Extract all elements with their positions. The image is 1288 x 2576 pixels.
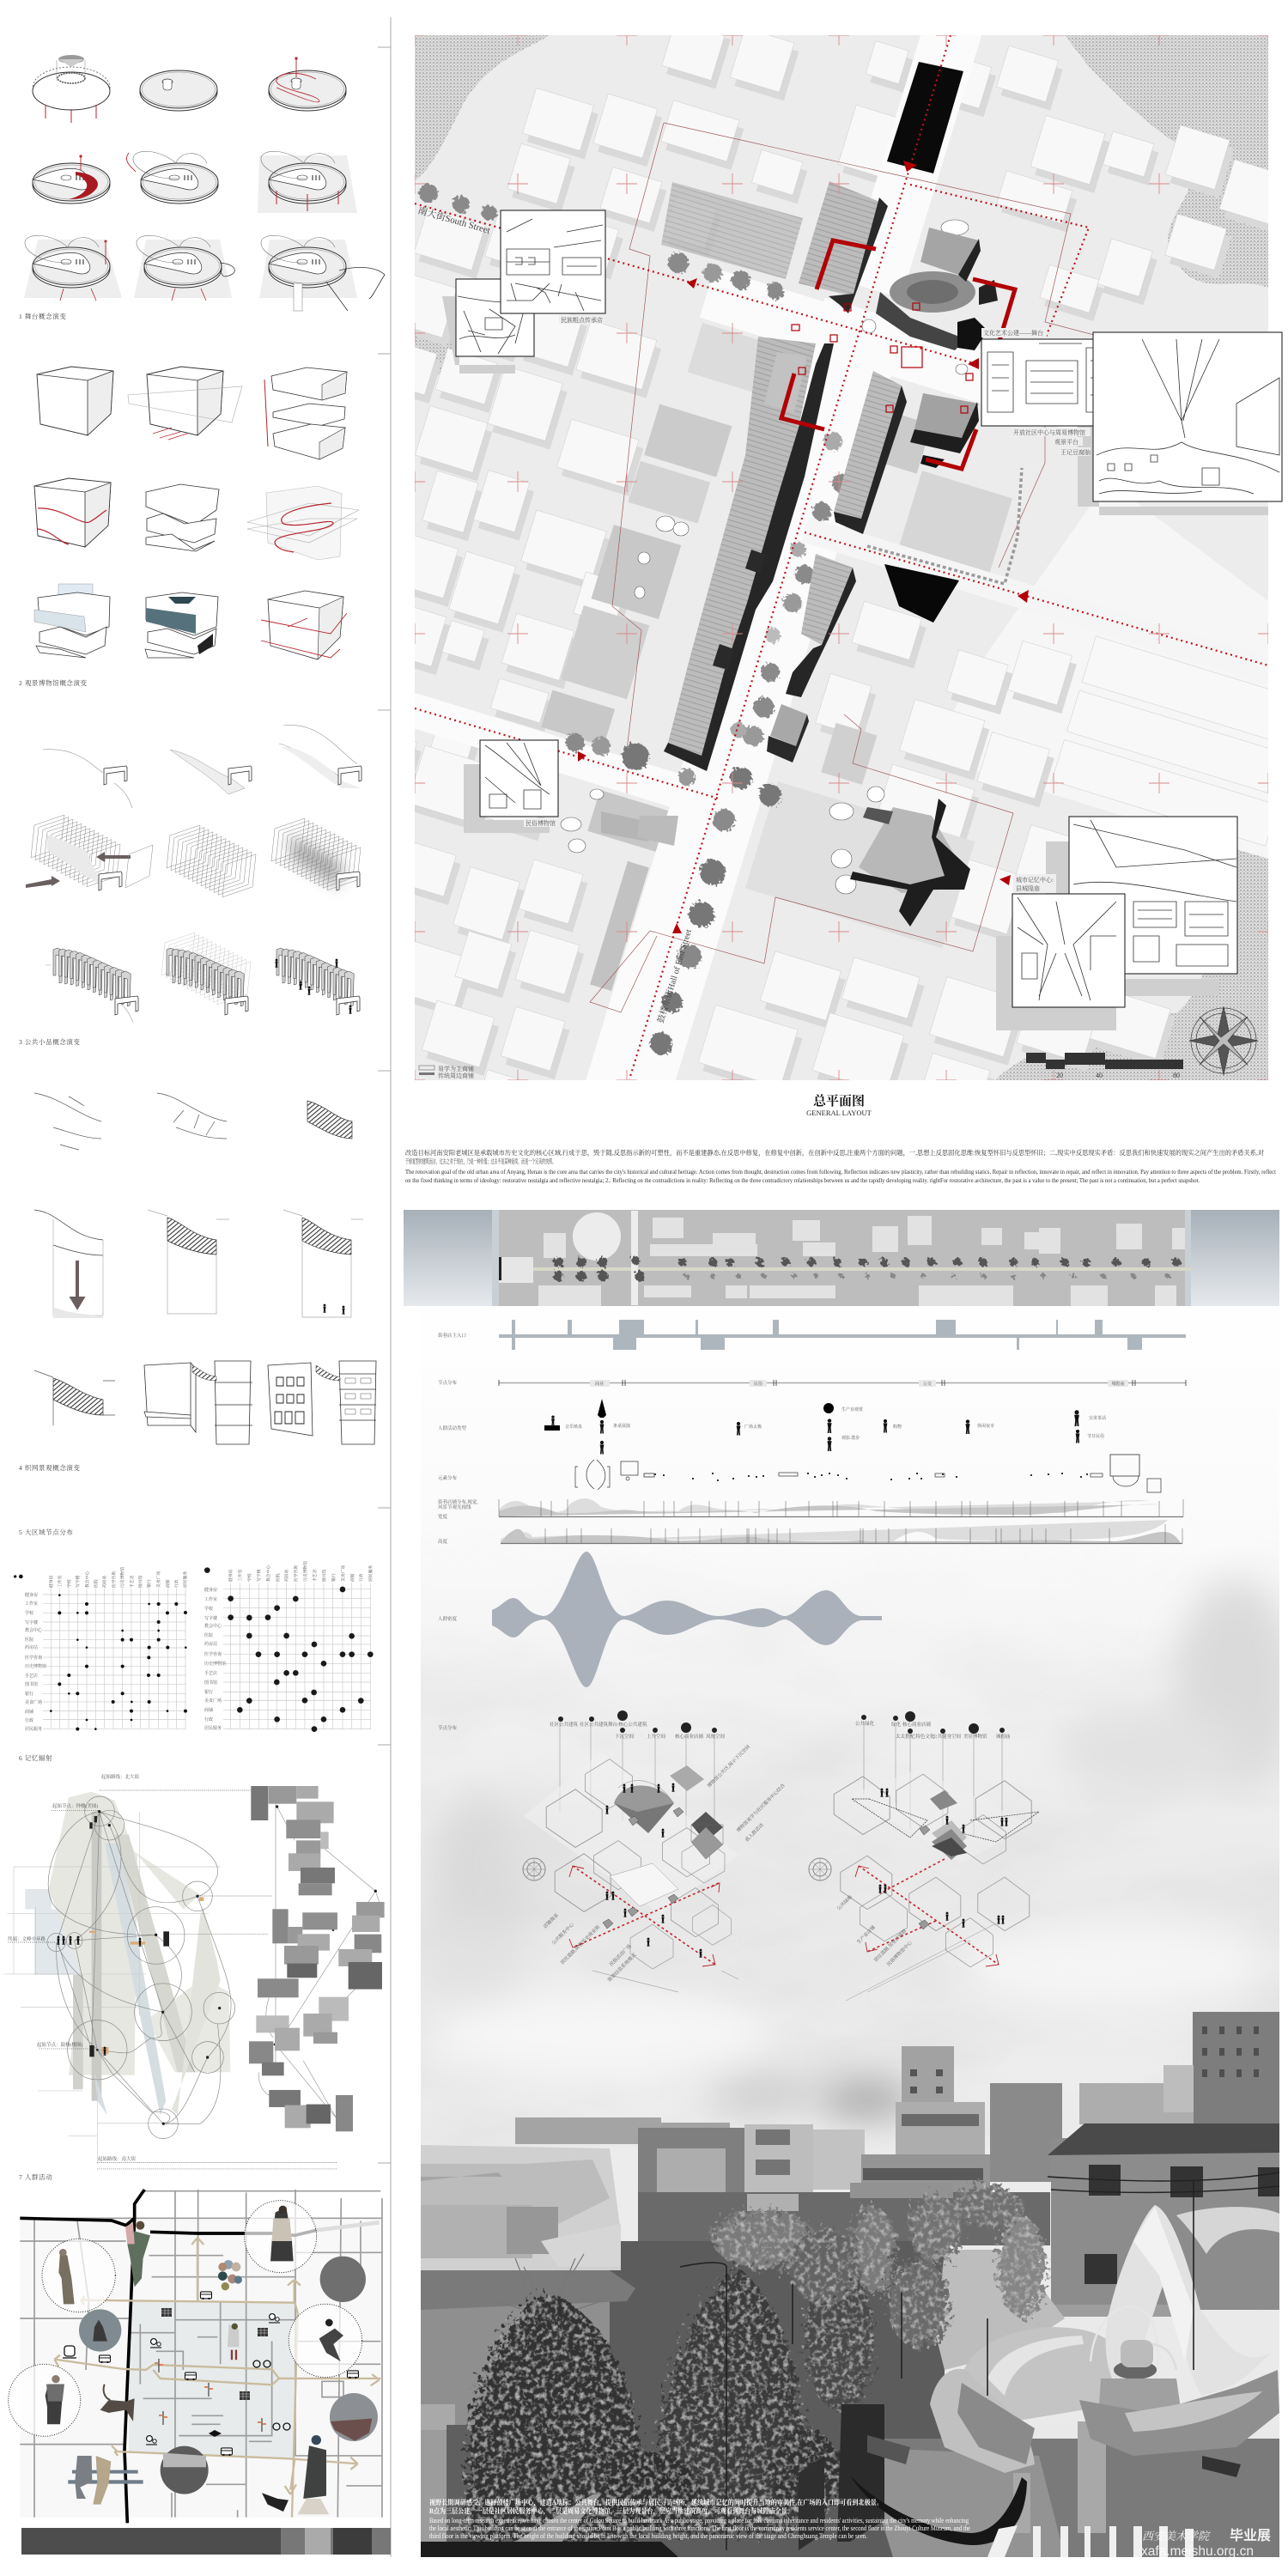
label: city temple: 城市记忆中心: [1016, 876, 1054, 884]
inset: folk shop [501, 210, 605, 313]
building roofs [415, 35, 1268, 1080]
panel: perspective render [421, 2012, 1279, 2559]
left matrix labels: 医院 [25, 1637, 33, 1643]
left matrix labels: 美食广场 [25, 1699, 42, 1705]
red L-shaped frames [781, 240, 1015, 469]
matrix column labels: 行政 [358, 1573, 364, 1582]
lower street band [638, 2192, 1050, 2245]
row labels: 元素分布 [438, 1474, 458, 1481]
left matrix grid [14, 1575, 187, 1731]
tree backdrop [601, 2241, 945, 2559]
left matrix labels [25, 1592, 46, 1732]
panel: crowd activity map [9, 2172, 391, 2555]
callout icons and labels right: 太太搭配,特色文化 [896, 1733, 935, 1740]
matrix column labels: 医学咨询 [111, 1571, 117, 1588]
foreground edges [421, 2476, 1194, 2557]
scale bar: 40 [1096, 1072, 1103, 1079]
inset: city temple far [1069, 817, 1237, 974]
museum row 3 [34, 584, 347, 659]
street names: 鼓楼东街Hall of East Street [654, 927, 694, 1024]
axo: lower left: 民俗活动广场 [608, 1942, 633, 1967]
callout icons and labels right: 美居博物馆 [963, 1733, 987, 1740]
node line chart: 公交 [923, 1381, 932, 1387]
central strip building west [664, 337, 834, 771]
axonometric node diagrams [438, 1710, 1039, 2001]
stage plaza dark buildings [661, 181, 998, 468]
skyline buildings [515, 2012, 1279, 2208]
element distribution icons [575, 1455, 1161, 1492]
width area chart [499, 1498, 1183, 1516]
left matrix labels: 写字楼 [25, 1619, 39, 1625]
matrix column labels: 健身房 [228, 1569, 234, 1582]
street analysis rows [438, 1320, 1186, 1687]
black shape south of plaza [884, 564, 959, 623]
temple complex [601, 799, 970, 927]
street blocks rotated [415, 35, 1268, 1080]
plan base [415, 35, 1268, 1080]
matrix column labels: 历史博物馆 [302, 1561, 308, 1582]
right brick building [1048, 2123, 1279, 2317]
axo: upper left [524, 1743, 787, 1915]
axo: upper left: 博物馆公共区,展示下沉空间 [706, 1743, 751, 1789]
row labels: 节点分布 [438, 1379, 458, 1386]
activity type labels: 条桌展演 [613, 1423, 631, 1429]
matrix column labels: 医院 [275, 1573, 281, 1582]
right matrix labels: 居民服务 [204, 1725, 222, 1731]
labels: plaza callouts: 文化艺术公建——舞台 [983, 329, 1043, 337]
labels: plaza callouts [981, 328, 1091, 456]
callout icons and labels right: 公共绿化 [855, 1720, 875, 1727]
trees mid-tone [713, 2185, 1046, 2410]
bottom dark strip [21, 2528, 391, 2555]
labels: plaza callouts: 开放社区中心与周易博物馆 [1013, 428, 1085, 436]
axo: lower right: 民俗博物馆中心 [885, 1939, 914, 1967]
activity type labels: 休闲夜市 [977, 1423, 994, 1429]
row labels: 人群密度 [438, 1615, 458, 1622]
gray mid-tone blocks [541, 323, 1012, 991]
matrix column labels: 图书馆 [321, 1569, 327, 1582]
right matrix labels: 行政 [204, 1716, 213, 1722]
right matrix labels [204, 1587, 226, 1731]
heading 2: 2 观景博物馆概念演变 [19, 678, 88, 687]
render caption: Based on long-term research experience, we have chosen the center of Gulou Square to build landmark A: a public stage, providing a place for folk customs inheritance and residents' activities, sustaining the city's memory while enhancing [429, 2517, 969, 2524]
node line chart [499, 1380, 1186, 1387]
sketch insets [456, 210, 1282, 1007]
matrix column labels: 商铺 [349, 1573, 355, 1582]
right matrix labels: 美食广场 [204, 1698, 222, 1704]
activity map [9, 2190, 382, 2523]
museum row 1 [37, 367, 347, 459]
right matrix labels: 写字楼 [204, 1615, 218, 1621]
axo: lower right: 生产业店铺 [855, 1923, 877, 1945]
landscape row 3 [34, 1361, 376, 1444]
render caption: third floor is the viewing platform. The height of the building should be in line with the local building height, and the panoramic view of the stage and Chenghuang Temple can be seen. [429, 2532, 867, 2540]
crosshair grid [404, 25, 1279, 1091]
matrix column labels: 历史博物馆 [119, 1567, 125, 1588]
node line chart: 商业 [595, 1381, 604, 1387]
memory network map [3, 1786, 385, 2169]
heading 1: 1 舞台概念演变 [19, 312, 66, 320]
right matrix labels: 医院 [204, 1632, 213, 1638]
matrix column labels: 学校 [246, 1573, 252, 1582]
ground and plaza [799, 2404, 1279, 2557]
right matrix labels: 药房站 [204, 1641, 217, 1647]
row labels: 宽度 [438, 1513, 448, 1520]
callout icons and labels left: 凤凰空间 [706, 1733, 726, 1740]
inset: folk shop rear [456, 279, 534, 356]
axo: upper right [834, 1769, 1039, 1864]
legend: 传统周边商铺 [438, 1072, 474, 1079]
row labels: 风景节观光视线 [438, 1504, 471, 1510]
labels: plaza callouts: 观景平台 [1054, 438, 1078, 446]
stage sculpture [930, 2205, 1279, 2473]
inset: folk museum [480, 740, 558, 817]
height area chart [501, 1520, 1182, 1544]
activity type icons [544, 1399, 1079, 1455]
heading 4: 4 织网景观概念演变 [19, 1463, 81, 1472]
memory labels: 起始路线：南大街 [98, 2155, 137, 2162]
activity type labels: 节日民俗 [1087, 1433, 1104, 1439]
callout icons and labels left: 社区公共建筑 [550, 1721, 579, 1728]
activity type labels: 观影.散步 [841, 1435, 860, 1441]
title: general layout [806, 1093, 872, 1117]
matrix column labels: 医学咨询 [293, 1565, 299, 1582]
axo: lower left: 店铺商业 [542, 1911, 560, 1929]
matrix column labels: 医院 [93, 1579, 99, 1588]
left matrix labels: 图书馆 [25, 1681, 38, 1687]
axo: lower right: 居住道路,邻里店铺群 [872, 1927, 908, 1963]
label: folk shop: 民族粗点传承店 [561, 316, 603, 324]
heading 5: 5 大区域节点分布 [19, 1528, 74, 1536]
row labels [438, 1332, 478, 1622]
left matrix labels: 健身房 [25, 1592, 38, 1598]
callout icons and labels right: 公共健身空间 [933, 1733, 962, 1740]
panel: public installation concept evolution [19, 725, 361, 1046]
dashed person circles [9, 2201, 362, 2436]
left matrix labels: 行政 [25, 1717, 33, 1723]
building shadows [415, 38, 1268, 1080]
matrix column labels: 居民服务 [182, 1571, 188, 1588]
left matrix labels: 居民服务 [25, 1726, 42, 1732]
street names: 南大街South Street [416, 204, 492, 236]
right matrix labels: 商铺 [204, 1707, 213, 1713]
watermark logo [1141, 2528, 1271, 2559]
scale bar: 20 [1056, 1072, 1063, 1079]
right matrix labels: 健身房 [204, 1587, 217, 1593]
memory photos [249, 1786, 385, 2131]
street names [416, 204, 694, 1024]
street lamps [680, 2181, 1194, 2550]
right matrix labels: 医学咨询 [204, 1651, 222, 1657]
axo: lower left: 居民道路,街巷历史商业街 [559, 1923, 602, 1965]
scale bar [1026, 1053, 1183, 1079]
watermark logo: xafa.meishu.org.cn [1141, 2544, 1254, 2559]
stage row 1 [33, 55, 346, 123]
left matrix labels: 历史博物馆 [25, 1663, 46, 1669]
panel: stage concept evolution [19, 55, 385, 320]
matrix column labels: 工作室 [237, 1569, 243, 1582]
right matrix labels: 手艺店 [204, 1670, 217, 1676]
callout icons and labels right [855, 1711, 1011, 1838]
matrix column labels: 美食广场 [155, 1571, 161, 1588]
matrix column labels: 手艺店 [312, 1569, 318, 1582]
matrix column labels: 教会中心 [265, 1565, 271, 1582]
landscape row 1 [34, 1093, 352, 1150]
activity type labels: 生产业观赏 [841, 1406, 864, 1413]
plaza pebble ring [867, 468, 1022, 584]
left matrix labels: 学校 [25, 1610, 34, 1616]
watermark logo: 西安美术学院 [1142, 2530, 1211, 2543]
left matrix labels: 银行 [25, 1691, 33, 1697]
axo: upper left: 底人群活动 [744, 1821, 765, 1843]
node line chart: 城隍庙 [1111, 1381, 1125, 1387]
title: general layout: 总平面图 [813, 1093, 865, 1109]
scale bar: 80 [1173, 1072, 1180, 1079]
callout icons and labels left: 下沉空间 [615, 1733, 635, 1740]
people figures [46, 2206, 343, 2514]
title: general layout: GENERAL LAYOUT [806, 1109, 872, 1117]
heading 6: 6 记忆辐射 [19, 1753, 52, 1762]
legend [419, 1065, 474, 1079]
callout icons and labels left: 上升空间 [647, 1733, 666, 1740]
matrix column labels: 学校 [66, 1579, 72, 1588]
legend: 易学为主商铺 [438, 1065, 474, 1072]
installation row 2 [26, 815, 361, 897]
description text: 改造目标河南安阳老城区是承载城市历史文化的核心区域,行成于思，毁于随,反思指示新的可塑性，而不是重建静态,在反思中修复，在修复中创新，在创新中反思,注重两个方面的问题，一,思想上反思固化思维:恢复型怀旧与反思型怀旧；二,现实中反思现实矛盾：反思我们和快速发展的现实之间产生出的矛盾关系,对 [405, 1148, 1264, 1157]
matrix column labels: 写字楼 [75, 1575, 81, 1588]
axo: upper left: 博物馆美学与社区服务中心结合 [735, 1782, 787, 1833]
site boundary [590, 123, 1110, 1012]
activity type labels: 音乐喷泉 [565, 1424, 582, 1430]
callout icons and labels right: 城隍庙 [996, 1733, 1011, 1740]
activity type labels: 宣讲茶话 [1089, 1415, 1106, 1421]
matrix column labels: 工作室 [57, 1575, 63, 1588]
left white building [421, 2145, 635, 2559]
compass [1189, 1006, 1258, 1075]
matrix column labels: 手艺店 [129, 1575, 135, 1588]
axo: lower right [809, 1856, 1030, 2001]
matrix column labels [48, 1561, 374, 1588]
matrix column labels: 美食广场 [340, 1565, 346, 1582]
activity type labels [565, 1406, 1106, 1441]
heading 3: 3 公共小品概念演变 [19, 1037, 81, 1046]
render caption: 视野长期调研感受，选择鼓楼广场中心，建造A地标：公共舞台，提供民俗传承与居民寻访场所，延续城市记忆的同时提升当地的审美性,在广场的入口即可看到北极景。 [429, 2498, 883, 2507]
matrix column labels: 图书馆 [137, 1575, 143, 1588]
matrix column labels: 银行 [146, 1579, 152, 1588]
matrix column labels: 药房站 [101, 1575, 107, 1588]
heading 7: 7 人群活动 [19, 2172, 52, 2181]
activity type labels: 购物 [893, 1424, 902, 1430]
callout icons and labels left: 舞台/核心公共建筑 [608, 1721, 647, 1728]
route arrowheads [578, 161, 1029, 933]
label: city temple [1013, 874, 1056, 893]
render caption: the local aesthetic. This building can be seen at the entrance of the square;Point B is a public building with three functions. The first floor is the community residents service center, the second floor is the Zhouyi Culture Museum, and the [429, 2524, 970, 2532]
white pebbles [561, 220, 969, 894]
left matrix labels: 药房站 [25, 1644, 38, 1650]
memory labels [8, 1773, 140, 2162]
left matrix labels: 手艺店 [25, 1673, 38, 1679]
map icons [63, 2292, 358, 2456]
axo: lower left: 公共服务中心 [550, 1921, 575, 1946]
memory labels: 起始节点：钟楼(美图) [52, 1802, 98, 1809]
panel: general layout plan [415, 35, 1268, 1080]
white street lanes [415, 35, 1078, 1080]
description text [405, 1148, 1277, 1184]
inset: open community plaza [981, 339, 1135, 426]
right matrix labels: 图书馆 [204, 1680, 217, 1686]
trees dark [465, 2267, 841, 2542]
small red squares [792, 303, 973, 413]
installation row 3 [46, 933, 360, 1022]
axo: lower right: 公共绿地 [835, 1893, 854, 1911]
landscape row 2 [34, 1210, 363, 1318]
matrix column labels: 银行 [331, 1573, 337, 1582]
installation row 1 [43, 725, 361, 808]
left matrix labels: 医学咨询 [25, 1655, 42, 1661]
matrix column labels: 行政 [173, 1579, 179, 1588]
watermark logo: 毕业展 [1230, 2528, 1271, 2543]
left matrix labels: 教会中心 [25, 1627, 43, 1633]
crowd density waveform [492, 1552, 882, 1687]
render caption [429, 2498, 970, 2540]
description text: 于修复型的建筑而言，过去之对于现在，乃是一种价值；过去不是某种延续，而是一个完美的快照。 [405, 1157, 556, 1166]
matrix column labels: 商铺 [165, 1579, 171, 1588]
red dotted routes [415, 35, 1268, 1079]
matrix column labels: 药房站 [283, 1569, 289, 1582]
stage row 3 [24, 235, 385, 311]
callout icons and labels left: 社区公共建筑 [580, 1721, 609, 1728]
museum row 2 [34, 478, 359, 560]
right matrix grid [204, 1567, 374, 1732]
activity type labels: 广场太极 [744, 1424, 762, 1430]
callout icons and labels left [550, 1710, 726, 1829]
panel: museum concept evolution [19, 367, 359, 687]
callout icons and labels right: 绿化 [891, 1721, 902, 1728]
label: city temple: 县城隍庙 [1016, 884, 1040, 892]
right matrix labels: 银行 [204, 1689, 213, 1695]
axo: lower left [523, 1841, 738, 1992]
wet street [936, 2250, 1065, 2370]
callout icons and labels left: 核心商业店铺 [675, 1733, 704, 1740]
memory labels: 终端：文峰中环路 [8, 1935, 46, 1942]
right matrix labels: 历史博物馆 [204, 1661, 226, 1667]
callout icons and labels right: 核心商业店铺 [902, 1721, 932, 1728]
axo: lower left: 街巷信息系统模式 [606, 1951, 638, 1983]
row labels: 街巷店主入口 [438, 1332, 466, 1339]
left matrix labels: 商铺 [25, 1709, 33, 1715]
stage row 2 [33, 151, 357, 213]
street analysis strip [404, 1210, 1279, 1306]
node line chart: 民俗 [754, 1381, 762, 1387]
matrix column labels: 居民服务 [368, 1565, 374, 1582]
render caption: B点为三层公建，一层是社区居民服务中心，二层是周易文化博物馆，三层为观景台，层应当地建筑高度，可观看到舞台与城隍庙全景。 [429, 2506, 793, 2516]
row labels: 高度 [438, 1538, 448, 1545]
left matrix labels: 工作室 [25, 1601, 38, 1607]
central strip building east [767, 371, 907, 762]
row labels: 街巷店铺分布,视觉, [438, 1498, 478, 1505]
label: folk museum [524, 818, 560, 827]
right matrix labels: 工作室 [204, 1596, 217, 1602]
matrix column labels: 健身房 [48, 1575, 54, 1588]
memory labels: 起始路线：北大街 [101, 1773, 140, 1780]
entrance bars chart [499, 1320, 1186, 1350]
right matrix labels: 教会中心 [204, 1623, 222, 1629]
inset: street perspective [1093, 332, 1282, 501]
photo circles [79, 2257, 378, 2494]
right matrix labels: 学校 [204, 1606, 214, 1612]
memory labels: 起始节点：鼓楼(楼图) [37, 2041, 82, 2048]
labels: plaza callouts: 王记豆腐脑 [1060, 448, 1091, 456]
inset shadows [442, 296, 1268, 1030]
street trees [419, 184, 851, 1054]
label: folk museum: 民俗博物馆 [526, 819, 556, 827]
top black road block [887, 62, 963, 173]
bare tree branches [498, 2254, 601, 2353]
row labels: 人群活动类型 [438, 1425, 467, 1431]
description text: on the fixed thinking in terms of ideology: restorative nostalgia and reflective nostalgia; 2.. Reflecting on the contradictions in reality: Reflecting on the three contradictory relationships between us and the rapidly developing reality. rightFor restorative architecture, the past is a value to the present; The past is not a continuation, but a perfect snapshot. [405, 1176, 1200, 1184]
panel: woven landscape concept evolution [19, 1093, 376, 1472]
inset: city temple near [1012, 894, 1125, 1007]
matrix column labels: 写字楼 [256, 1569, 262, 1582]
panel: regional node matrices [14, 1528, 374, 1732]
matrix column labels: 教会中心 [84, 1571, 90, 1588]
panel: memory radiation [3, 1753, 385, 2169]
left column divider with ticks [378, 17, 391, 2557]
sky background [421, 1288, 1288, 2559]
label: node distribution: 节点分布 [438, 1724, 458, 1731]
